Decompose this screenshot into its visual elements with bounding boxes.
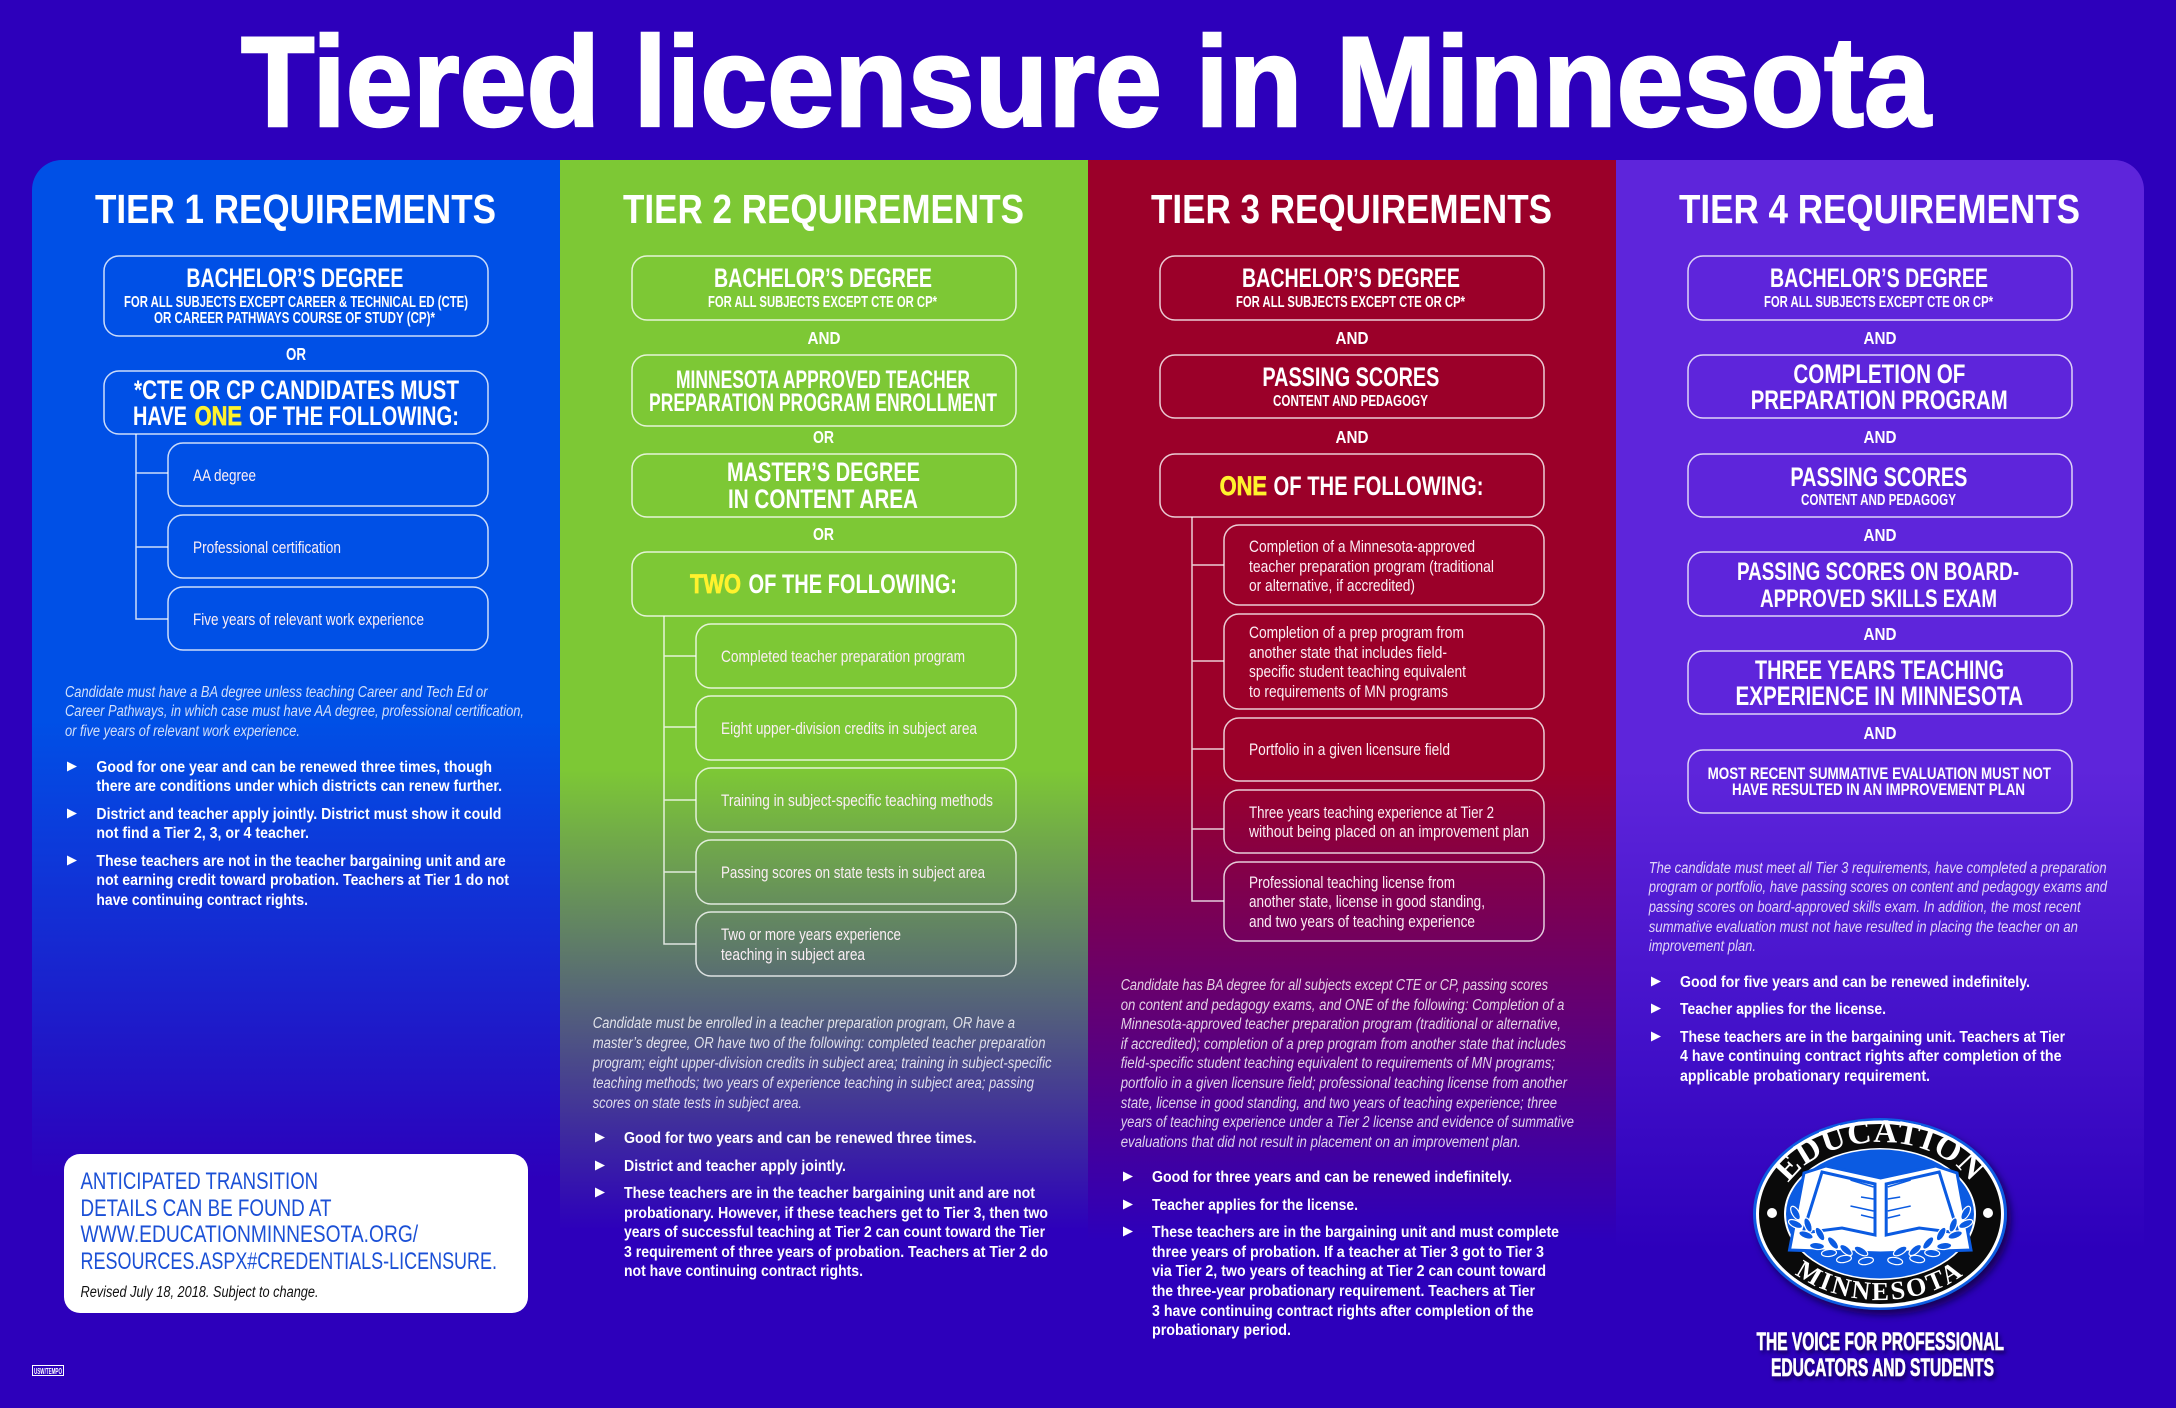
option: teaching experience: [696, 912, 1016, 976]
tier 2 bullet list: probationary. However, if these teachers get to Tier 3, then two: [624, 1205, 1048, 1222]
tier 1 bullet list: not find a Tier 2, 3, or 4 teacher.: [96, 825, 309, 842]
tier 1 background: [32, 160, 560, 1408]
box: master's degree: IN CONTENT AREA: [728, 484, 918, 514]
box: bachelor's degree: [632, 256, 1016, 320]
tier 4 bullet list: These teachers are in the bargaining unit. Teachers at Tier: [1680, 1029, 2065, 1046]
box: passing scores: CONTENT AND PEDAGOGY: [1801, 492, 1956, 509]
box: three years teaching: THREE YEARS TEACHING: [1755, 655, 2004, 685]
logo: Education Minnesota seal: [1752, 1118, 2016, 1320]
union bug: USW/TEMPO: [34, 1367, 62, 1376]
tier 3 bullet list: 3 have continuing contract rights after completion of the: [1152, 1303, 1534, 1320]
option: Minnesota-approved program: [1224, 525, 1544, 605]
box: board-approved skills exam: PASSING SCORES ON BOARD-: [1737, 558, 2019, 586]
tier 4 summary text: improvement plan.: [1649, 938, 1756, 955]
callout: anticipated transition: ANTICIPATED TRANSITION: [80, 1168, 318, 1195]
box: bachelor's degree: BACHELOR’S DEGREE: [1242, 263, 1460, 293]
option: teacher preparation: [696, 624, 1016, 688]
union bug: [32, 1366, 64, 1376]
tier 4 summary text: [1648, 860, 2108, 955]
option: three years experience: Three years teaching experience at Tier 2: [1249, 804, 1494, 822]
box: one of the following: OF THE FOLLOWING:: [1274, 471, 1484, 501]
option: license from another state: and two years of teaching experience: [1249, 913, 1475, 931]
panel: tier 2: [560, 160, 1088, 1408]
option: prep program from another state: Completion of a prep program from: [1249, 624, 1464, 642]
callout: anticipated transition: [64, 1154, 528, 1313]
option: state tests: [696, 840, 1016, 904]
connector: or: OR: [813, 524, 834, 544]
option: work experience: [168, 587, 488, 650]
tagline: THE VOICE FOR PROFESSIONAL: [1756, 1328, 2004, 1356]
tier 2 summary text: master’s degree, OR have two of the following: completed teacher preparation: [593, 1035, 1045, 1052]
option: Minnesota-approved program: teacher preparation program (traditional: [1249, 558, 1494, 576]
tier 4 summary text: summative evaluation must not have resulted in placing the teacher on an: [1649, 919, 2078, 936]
box: teacher preparation enrollment: [632, 355, 1016, 426]
connector: or: OR: [813, 427, 834, 447]
tier 4 background: [1616, 160, 2144, 1408]
tier 3 summary text: if accredited); completion of a prep program from another state that includes: [1121, 1036, 1566, 1053]
box: bachelor's degree: OR CAREER PATHWAYS COURSE OF STUDY (CP)*: [154, 310, 436, 327]
box: two of the following: TWO: [690, 569, 741, 599]
option: work experience: Five years of relevant work experience: [193, 611, 424, 629]
box: one of the following: [1160, 454, 1544, 517]
tier 2 bullet list: years of successful teaching at Tier 2 can count toward the Tier: [624, 1224, 1045, 1241]
option: AA degree: [168, 443, 488, 506]
option: portfolio: [1224, 718, 1544, 781]
tier 4 bullet list: 4 have continuing contract rights after completion of the: [1680, 1048, 2062, 1065]
box: bachelor's degree: FOR ALL SUBJECTS EXCEPT CTE OR CP*: [708, 294, 938, 311]
box: bachelor's degree: BACHELOR’S DEGREE: [1770, 263, 1988, 293]
box: CTE or CP candidates: OF THE FOLLOWING:: [249, 401, 459, 431]
title: Tiered licensure in Minnesota: [241, 11, 1932, 154]
box: teacher preparation enrollment: MINNESOTA APPROVED TEACHER: [676, 366, 970, 394]
tier 3 bullet list: These teachers are in the bargaining unit and must complete: [1152, 1224, 1559, 1241]
box: bachelor's degree: [1688, 256, 2072, 320]
box: passing scores: PASSING SCORES: [1790, 462, 1967, 492]
tier 3 bullet list: three years of probation. If a teacher at Tier 3 got to Tier 3: [1152, 1244, 1544, 1261]
box: CTE or CP candidates: ONE: [195, 401, 242, 431]
tier 1 bullet list: [67, 759, 509, 909]
tier 2 summary text: [592, 1015, 1052, 1112]
option: upper-division credits: Eight upper-division credits in subject area: [721, 720, 978, 738]
tier 2 bullet list: District and teacher apply jointly.: [624, 1158, 846, 1175]
box: bachelor's degree: FOR ALL SUBJECTS EXCEPT CTE OR CP*: [1764, 294, 1994, 311]
option: license from another state: another state, license in good standing,: [1249, 893, 1485, 911]
option: license from another state: Professional teaching license from: [1249, 874, 1455, 892]
tier 2 bullet list: These teachers are in the teacher bargaining unit and are not: [624, 1185, 1035, 1202]
option: prep program from another state: specific student teaching equivalent: [1249, 663, 1466, 681]
box: three years teaching: [1688, 651, 2072, 714]
option: Minnesota-approved program: or alternative, if accredited): [1249, 577, 1415, 595]
tagline: [1756, 1328, 2004, 1382]
box: completion of preparation program: [1688, 355, 2072, 418]
tier 4 summary text: passing scores on board-approved skills exam. In addition, the most recent: [1648, 899, 2081, 916]
tier 3 bullet list: probationary period.: [1152, 1322, 1291, 1339]
tier 4 bullet list: Teacher applies for the license.: [1680, 1001, 1886, 1018]
connector: or: OR: [286, 344, 306, 364]
connector: and: AND: [1864, 427, 1896, 447]
tier 1 bullet list: not earning credit toward probation. Teachers at Tier 1 do not: [96, 872, 509, 889]
tier 4 bullet list: [1651, 974, 2065, 1085]
box: board-approved skills exam: APPROVED SKILLS EXAM: [1760, 585, 1997, 613]
option: professional certification: Professional certification: [193, 539, 341, 557]
tier 3 bullet list: Good for three years and can be renewed indefinitely.: [1152, 1169, 1512, 1186]
tier 3 bullet list: the three-year probationary requirement. Teachers at Tier: [1152, 1283, 1535, 1300]
tier 2 bullet list: 3 requirement of three years of probation. Teachers at Tier 2 do: [624, 1244, 1048, 1261]
box: three years teaching: EXPERIENCE IN MINNESOTA: [1736, 681, 2023, 711]
tier 1 bullet list: Good for one year and can be renewed three times, though: [96, 759, 492, 776]
tier 3 summary text: [1120, 977, 1574, 1151]
box: bachelor's degree: FOR ALL SUBJECTS EXCEPT CTE OR CP*: [1236, 294, 1466, 311]
option: upper-division credits: [696, 696, 1016, 760]
option: teaching methods: [696, 768, 1016, 832]
logo: Education Minnesota seal: EDUCATION: [1772, 1120, 1987, 1182]
box: passing scores: PASSING SCORES: [1262, 362, 1439, 392]
box: master's degree: [632, 454, 1016, 517]
tier 1 summary text: Career Pathways, in which case must have AA degree, professional certification,: [65, 703, 524, 720]
tier 1 bullet list: there are conditions under which districts can renew further.: [96, 778, 502, 795]
tagline: EDUCATORS AND STUDENTS: [1771, 1354, 1994, 1382]
tier 2 bullet list: not have continuing contract rights.: [624, 1263, 863, 1280]
connector: and: AND: [1864, 624, 1896, 644]
tier 3 summary text: Candidate has BA degree for all subjects except CTE or CP, passing scores: [1121, 977, 1548, 994]
tier 3 heading: TIER 3 REQUIREMENTS: [1151, 186, 1552, 232]
option: prep program from another state: [1224, 614, 1544, 709]
callout: anticipated transition: DETAILS CAN BE FOUND AT: [80, 1195, 332, 1222]
option: license from another state: [1224, 862, 1544, 941]
panel: tier 1: [32, 160, 560, 1408]
panel: tier 3: [1088, 160, 1616, 1408]
box: bachelor's degree: BACHELOR’S DEGREE: [714, 263, 932, 293]
connector: and: AND: [1336, 427, 1368, 447]
tier 3 summary text: Minnesota-approved teacher preparation program (traditional or alternative,: [1121, 1016, 1561, 1033]
tier 2 summary text: scores on state tests in subject area.: [593, 1095, 802, 1112]
box: summative evaluation: [1688, 750, 2072, 813]
option: AA degree: AA degree: [193, 467, 256, 485]
tier 3 summary text: portfolio in a given licensure field; professional teaching license from another: [1120, 1075, 1568, 1092]
tier 3 summary text: evaluations that did not result in placement on an improvement plan.: [1121, 1134, 1521, 1151]
box: bachelor's degree: BACHELOR’S DEGREE: [186, 263, 403, 293]
tier 4 heading: TIER 4 REQUIREMENTS: [1679, 186, 2080, 232]
tier 1 heading: TIER 1 REQUIREMENTS: [95, 186, 496, 232]
connector: and: AND: [1864, 525, 1896, 545]
tier 3 summary text: on content and pedagogy exams, and ONE of the following: Completion of a: [1121, 997, 1565, 1014]
box: two of the following: OF THE FOLLOWING:: [748, 569, 957, 599]
option: professional certification: [168, 515, 488, 578]
box: CTE or CP candidates: *CTE OR CP CANDIDATES MUST: [134, 375, 459, 405]
box: board-approved skills exam: [1688, 552, 2072, 616]
box: completion of preparation program: COMPLETION OF: [1793, 359, 1965, 389]
option: prep program from another state: another state that includes field-: [1249, 644, 1447, 662]
tier 3 summary text: field-specific student teaching equivalent to requirements of MN programs;: [1121, 1055, 1555, 1072]
box: completion of preparation program: PREPARATION PROGRAM: [1751, 385, 2008, 415]
tier 2 summary text: Candidate must be enrolled in a teacher preparation program, OR have a: [593, 1015, 1015, 1032]
tier 1 bullet list: These teachers are not in the teacher bargaining unit and are: [96, 853, 506, 870]
tier 4 bullet list: applicable probationary requirement.: [1680, 1068, 1930, 1085]
tier 1 bullet list: District and teacher apply jointly. District must show it could: [96, 806, 501, 823]
option: three years experience: [1224, 790, 1544, 853]
box: two of the following: [632, 552, 1016, 616]
tier 1 summary text: [65, 684, 524, 740]
tier 2 bullet list: Good for two years and can be renewed three times.: [624, 1130, 976, 1147]
tier 3 bullet list: via Tier 2, two years of teaching at Tier 2 can count toward: [1152, 1263, 1546, 1280]
option: Minnesota-approved program: Completion of a Minnesota-approved: [1249, 538, 1475, 556]
box: passing scores: [1688, 454, 2072, 517]
box: one of the following: ONE: [1220, 471, 1267, 501]
tree connector lines: [664, 616, 696, 944]
box: bachelor's degree: [1160, 256, 1544, 320]
tier 3 bullet list: [1123, 1169, 1559, 1339]
option: teaching methods: Training in subject-specific teaching methods: [721, 792, 993, 810]
option: portfolio: Portfolio in a given licensure field: [1249, 741, 1450, 759]
box: passing scores: CONTENT AND PEDAGOGY: [1273, 393, 1428, 410]
tier 1 summary text: or five years of relevant work experience.: [65, 723, 300, 740]
tier 2 bullet list: [595, 1130, 1048, 1280]
box: bachelor's degree: FOR ALL SUBJECTS EXCEPT CAREER & TECHNICAL ED (CTE): [124, 294, 468, 311]
box: master's degree: MASTER’S DEGREE: [727, 457, 920, 487]
callout: anticipated transition: WWW.EDUCATIONMINNESOTA.ORG/: [80, 1221, 418, 1248]
tier 2 background: [560, 160, 1088, 1408]
option: state tests: Passing scores on state tests in subject area: [721, 864, 986, 882]
tier 3 background: [1088, 160, 1616, 1408]
option: teaching experience: teaching in subject area: [721, 946, 866, 964]
option: teacher preparation: Completed teacher preparation program: [721, 648, 965, 666]
tier 1 summary text: Candidate must have a BA degree unless teaching Career and Tech Ed or: [65, 684, 488, 701]
box: bachelor's degree: [104, 256, 488, 336]
box: summative evaluation: HAVE RESULTED IN AN IMPROVEMENT PLAN: [1732, 780, 2025, 799]
callout: anticipated transition: Revised July 18, 2018. Subject to change.: [80, 1284, 318, 1301]
option: three years experience: without being placed on an improvement plan: [1248, 823, 1529, 841]
option: teaching experience: Two or more years experience: [721, 926, 901, 944]
box: summative evaluation: MOST RECENT SUMMATIVE EVALUATION MUST NOT: [1708, 764, 2051, 783]
tree connector lines: [1192, 517, 1224, 901]
connector: and: AND: [1864, 723, 1896, 743]
tier 3 summary text: state, license in good standing, and two years of teaching experience; three: [1121, 1095, 1557, 1112]
tier 2 summary text: program; eight upper-division credits in subject area; training in subject-specific: [592, 1055, 1052, 1072]
connector: and: AND: [1336, 328, 1368, 348]
connector: and: AND: [1864, 328, 1896, 348]
logo: Education Minnesota seal: MINNESOTA: [1794, 1260, 1963, 1300]
callout: anticipated transition: RESOURCES.ASPX#CREDENTIALS-LICENSURE.: [80, 1248, 497, 1275]
connector: and: AND: [808, 328, 840, 348]
option: prep program from another state: to requirements of MN programs: [1249, 683, 1448, 701]
tier 2 summary text: teaching methods; two years of experience teaching in subject area; passing: [593, 1075, 1034, 1092]
box: CTE or CP candidates: HAVE: [133, 401, 187, 431]
box: passing scores: [1160, 355, 1544, 418]
tier 4 bullet list: Good for five years and can be renewed indefinitely.: [1680, 974, 2030, 991]
tier 1 bullet list: have continuing contract rights.: [96, 892, 308, 909]
box: teacher preparation enrollment: PREPARATION PROGRAM ENROLLMENT: [649, 389, 997, 417]
tier 2 heading: TIER 2 REQUIREMENTS: [623, 186, 1024, 232]
tier 3 summary text: years of teaching experience under a Tier 2 license and evidence of summative: [1120, 1114, 1574, 1131]
tree connector lines: [136, 434, 168, 619]
box: CTE or CP candidates: [104, 371, 488, 434]
panel: tier 4: [1616, 160, 2144, 1408]
tier 3 bullet list: Teacher applies for the license.: [1152, 1197, 1358, 1214]
